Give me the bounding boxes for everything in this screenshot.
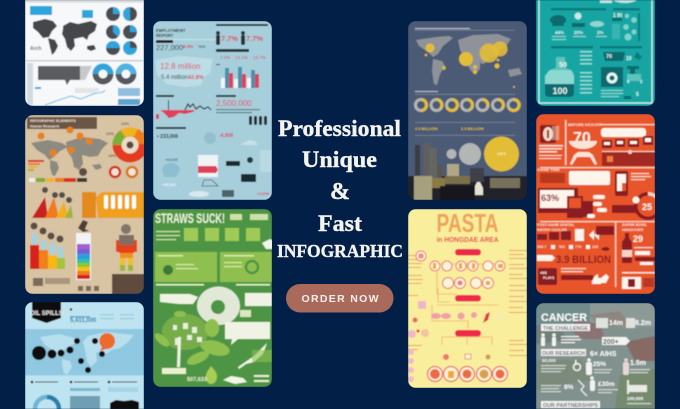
our research [541, 349, 617, 358]
headline figures: 227,000 [156, 43, 183, 52]
headline figures: *5% [198, 44, 206, 49]
14m and 8.2m: 14m [609, 320, 623, 327]
section labels [31, 381, 137, 383]
63 percent monitor: 63% [541, 193, 559, 203]
488 plays [538, 268, 609, 285]
8 percent and DNA: 8% [564, 384, 574, 391]
tan world map [31, 137, 108, 176]
panel: world data infographic (top left): Arch [30, 46, 41, 52]
top shapes [600, 0, 637, 3]
water bottle [545, 57, 574, 97]
title [436, 208, 499, 244]
job figures: -4,000 [219, 133, 233, 139]
ring charts row [416, 99, 519, 110]
2,500,000 figure [216, 95, 260, 113]
world map [33, 19, 97, 55]
panel: straws suck infographic [153, 209, 274, 387]
percentage row: 7.2% [220, 55, 230, 60]
panel: human research infographic: 23% [121, 121, 129, 126]
green boxes [155, 252, 272, 282]
mini stats: 906.7 [537, 245, 547, 249]
small TV icons [602, 136, 653, 148]
tap [624, 66, 643, 99]
title [541, 312, 590, 332]
3.9 billion [537, 254, 611, 266]
sub headings [156, 284, 270, 286]
ingredient circles [430, 261, 505, 288]
ring chart [117, 132, 143, 158]
gender figures: 7.7% [246, 34, 263, 43]
bathtub [603, 52, 642, 62]
tap: 6 [627, 79, 630, 84]
mini stats [537, 245, 598, 249]
panel: cancer infographic [536, 303, 655, 409]
panel: human research infographic [25, 115, 144, 294]
panel: employment report infographic [153, 21, 272, 200]
grouped bar chart [216, 64, 259, 88]
hangover: SUPER BOWL [622, 223, 648, 227]
title [156, 28, 186, 38]
washing machine [601, 67, 623, 87]
billion figures: 1.9 BILLION [461, 126, 484, 131]
dot grid [118, 88, 140, 105]
headline figures [156, 44, 206, 52]
left column icons [408, 251, 429, 382]
side columns [408, 250, 527, 356]
black location markers [32, 338, 105, 373]
our partnerships: OUR PARTNERSHIPS [543, 403, 598, 409]
job loss area chart [156, 95, 211, 119]
colour bars [28, 160, 87, 182]
people icons [249, 116, 267, 125]
hangover: HANGOVER [622, 228, 644, 232]
panel: population map infographic [408, 21, 527, 200]
water bottle: 50 [559, 62, 567, 69]
gender figures: 7.7% [221, 34, 238, 43]
job figures: • 233,000 [157, 134, 178, 140]
bed icon and 100,000: 100,000 [627, 396, 644, 401]
water source icons [550, 12, 604, 27]
dark banner [602, 150, 655, 166]
rainbow tower [76, 233, 91, 280]
billion figures: 2.9 BILLION [415, 126, 438, 131]
gender figures [216, 24, 268, 45]
droplets [623, 14, 637, 41]
panel: oil spills infographic [25, 302, 144, 409]
bottom row [162, 366, 269, 384]
photo background blotches [536, 303, 655, 409]
globe and speech bubbles [160, 287, 272, 325]
bottom illustrations: 12,000 [257, 191, 270, 196]
triangle chart [32, 197, 73, 218]
button: order now: ORDER NOW [302, 293, 379, 305]
bottom right box [622, 272, 655, 289]
percentage row [220, 56, 266, 60]
job figures [157, 132, 258, 145]
game time: GAME TIME [537, 167, 560, 172]
people icons [541, 333, 581, 346]
oil spill figure: 5,411,000 [70, 318, 97, 324]
like counters [567, 195, 607, 218]
US map [155, 56, 213, 87]
city skyline photo [408, 143, 527, 200]
donut chart [35, 397, 59, 409]
25 percent: 25% [593, 361, 606, 368]
488 plays: 488 [540, 270, 547, 275]
200+ banner: 200+ [603, 339, 619, 346]
bottom illustrations: +43,000 [165, 158, 178, 162]
barbecue grill [569, 141, 597, 165]
60,000: 60,000 [542, 358, 556, 363]
headline: Professional Unique & Fast Infographic: Fast [318, 211, 362, 236]
ingredient icons [431, 312, 502, 323]
panel: human research infographic: 15% [108, 153, 116, 158]
hangover [622, 223, 655, 265]
63 percent monitor [538, 188, 578, 213]
line chart [45, 90, 105, 105]
orange people banner [82, 192, 144, 218]
title: THE CHALLENGE [543, 326, 588, 332]
title: EMPLOYMENT [156, 28, 186, 33]
orange marker [99, 333, 115, 351]
donut charts [96, 66, 134, 82]
percentage row: 14.1% [235, 55, 248, 60]
hangover: 29 [633, 234, 643, 244]
headline: Professional Unique & Fast Infographic: INFOGRAPHIC [277, 241, 403, 261]
headline: Professional Unique & Fast Infographic: Professional [278, 116, 401, 141]
percent figures [555, 30, 604, 35]
bathtub: 70 [606, 54, 612, 60]
title: CANCER [541, 312, 587, 324]
water bottle: 100 [552, 86, 568, 96]
red statistics: 42.8% [188, 75, 204, 81]
brown footer box [112, 274, 144, 294]
bar block [70, 396, 100, 409]
percent figures: 20% [574, 30, 583, 35]
1 litre figure: 1 IN [613, 13, 623, 19]
mini stats: 561 [559, 245, 565, 249]
white speech box [601, 128, 646, 137]
red statistics [160, 62, 204, 81]
mini stats: 180 [592, 245, 598, 249]
black silhouette [110, 400, 139, 409]
button: order now [286, 284, 394, 312]
bird [238, 343, 267, 369]
bathtub: 10 [626, 56, 632, 62]
post-game: POST-GAME DIGITAL [537, 223, 575, 227]
game time [537, 167, 628, 196]
25 dial: 25 [642, 202, 652, 212]
heading banner: INFOGRAPHIC ELEMENTS [30, 119, 76, 123]
before kickoff: BEFORE KICKOFF [568, 123, 602, 127]
before kickoff: 70 [573, 130, 591, 147]
process icons [184, 228, 260, 241]
panel: world data infographic (top left) [25, 0, 144, 106]
panel: human research infographic: 23% [106, 131, 114, 136]
bottom illustrations: +48,000 [162, 183, 176, 187]
30m: £30m [598, 381, 615, 388]
sauce items [443, 354, 490, 360]
14m and 8.2m: 8.2m [635, 320, 651, 327]
billion figures [415, 126, 484, 131]
tap: 5 [636, 92, 639, 98]
bubble comparison [446, 136, 519, 172]
3.9 billion: 3.9 BILLION [556, 254, 611, 266]
title: STRAWS SUCK! [155, 210, 225, 226]
1.5m: 1.5m [630, 360, 646, 367]
connector lines [432, 262, 499, 345]
heading banner [27, 117, 97, 129]
title: PASTA [436, 208, 499, 238]
small rings [110, 167, 137, 177]
headline figures: 8.3% [183, 44, 193, 49]
our research: OUR RESEARCH [542, 351, 585, 357]
red statistics: 5.4 million [161, 75, 188, 81]
title: in HONGDAE AREA [436, 235, 499, 244]
map pins [38, 126, 92, 156]
our research: 6× AIHS [590, 351, 617, 358]
red section pills [455, 249, 481, 336]
speech box [225, 322, 270, 345]
post-game: WATER COOLER [537, 228, 567, 232]
headline: Professional Unique & Fast Infographic [277, 116, 403, 261]
2,500,000 figure: 2,500,000 [216, 99, 252, 108]
mini stats: 770 [575, 245, 581, 249]
before kickoff [568, 123, 602, 147]
488 plays: PLAYS [543, 276, 555, 280]
percentage row: 13.7% [253, 55, 266, 60]
body figure [116, 224, 137, 271]
percent figures: 2% [597, 30, 604, 35]
post-game [537, 223, 614, 241]
heading banner: Human Research [30, 124, 59, 128]
percent figures: 44% [555, 30, 564, 35]
headline: Professional Unique & Fast Infographic: & [330, 179, 350, 205]
headline: Professional Unique & Fast Infographic: Unique [302, 147, 377, 172]
section bars [551, 8, 642, 48]
25 dial [612, 192, 662, 220]
red statistics: 12.8 million [160, 62, 200, 71]
speech box [38, 66, 80, 85]
light world map [40, 332, 134, 375]
football logo [540, 125, 559, 143]
pasta plates [428, 366, 508, 382]
panel: pasta infographic [408, 208, 527, 388]
pie charts [106, 7, 137, 55]
black banner: OIL SPILLS [30, 311, 63, 317]
panel: orange super bowl infographic [536, 114, 662, 294]
yellow bubbles [425, 42, 515, 88]
title: REPORT [156, 33, 174, 38]
bottom row: 507,633 [187, 377, 207, 383]
panel: teal water infographic [536, 0, 655, 106]
14m and 8.2m [596, 318, 651, 328]
bubble comparison: 100% [497, 152, 506, 156]
turtle illustration [153, 311, 231, 368]
tap: 2 [640, 79, 643, 84]
bottom illustrations [162, 155, 270, 197]
grey world map [416, 34, 522, 85]
3D bar chart [30, 222, 65, 269]
